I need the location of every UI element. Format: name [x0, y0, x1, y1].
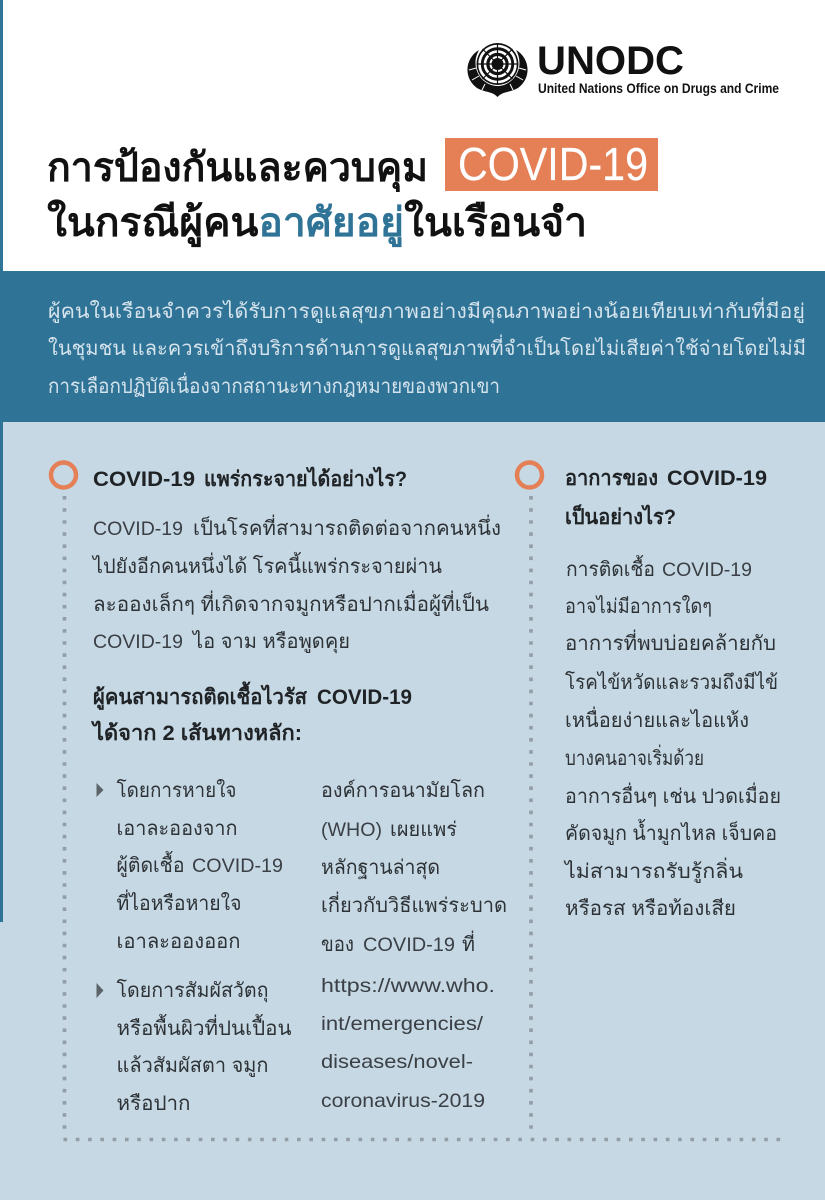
left paragraph: COVID-19 [93, 631, 183, 653]
right paragraph: คัดจมูก น้ำมูกไหล เจ็บคอ [565, 819, 777, 846]
bullet 1: เอาละอองออก [116, 931, 240, 953]
right paragraph: เหนื่อยง่ายและไอแห้ง [565, 706, 749, 732]
left paragraph: เป็นโรคที่สามารถติดต่อจากคนหนึ่ง [193, 514, 501, 540]
right paragraph: อาการอื่นๆ เช่น ปวดเมื่อย [565, 782, 781, 808]
right heading: COVID-19 [667, 467, 767, 490]
bold subheading: ได้จาก 2 เส้นทางหลัก: [91, 720, 302, 745]
intro line 1: ผู้คนในเรือนจำควรได้รับการดูแลสุขภาพอย่างมีคุณภาพอย่างน้อยเทียบเท่ากับที่มีอยู่ [48, 297, 805, 324]
WHO note: องค์การอนามัยโลก [321, 779, 485, 802]
WHO note: ที่ [462, 930, 475, 956]
right paragraph: หรือรส หรือท้องเสีย [565, 898, 736, 920]
ring marker right [517, 462, 542, 488]
bullet 2: แล้วสัมผัสตา จมูก [116, 1055, 268, 1078]
right paragraph: บางคนอาจเริ่มด้วย [565, 744, 704, 770]
left paragraph: COVID-19 [93, 518, 183, 540]
intro line 2: ในชุมชน และควรเข้าถึงบริการด้านการดูแลสุขภาพที่จำเป็นโดยไม่เสียค่าใช้จ่ายโดยไม่มี [48, 334, 806, 361]
left paragraph: ละอองเล็กๆ ที่เกิดจากจมูกหรือปากเมื่อผู้ที่เป็น [93, 590, 489, 617]
icon: UN emblem [467, 43, 528, 97]
right heading: เป็นอย่างไร? [565, 503, 676, 529]
WHO note: หลักฐานล่าสุด [321, 857, 440, 880]
left heading: COVID-19 [93, 468, 195, 491]
right paragraph: ไม่สามารถรับรู้กลิ่น [563, 857, 743, 884]
logo subtitle: United Nations Office on Drugs and Crime [538, 80, 779, 96]
WHO note: เกี่ยวกับวิธีแพร่ระบาด [321, 891, 507, 917]
WHO note: ของ [321, 934, 354, 956]
logo: UNODC [467, 39, 779, 97]
title [47, 138, 658, 247]
bullet 2: หรือพื้นผิวที่ปนเปื้อน [116, 1014, 292, 1040]
right paragraph: การติดเชื้อ [566, 555, 655, 581]
bullet 1: เอาละอองจาก [116, 818, 238, 840]
bold subheading [91, 681, 412, 745]
WHO note: (WHO) [321, 819, 382, 841]
left paragraph [91, 514, 501, 654]
WHO note: diseases/novel- [321, 1051, 473, 1073]
bullet 2: โดยการสัมผัสวัตถุ [116, 979, 268, 1003]
bold subheading: COVID-19 [317, 686, 412, 709]
bold subheading: ผู้คนสามารถติดเชื้อไวรัส [93, 681, 307, 711]
bullet 1: โดยการหายใจ [116, 779, 236, 802]
left paragraph: ไอ จาม หรือพูดคุย [191, 630, 350, 654]
intro line 3: การเลือกปฏิบัติเนื่องจากสถานะทางกฎหมายของพวกเขา [48, 372, 500, 398]
left paragraph: ไปยังอีกคนหนึ่งได้ โรคนี้แพร่กระจายผ่าน [91, 552, 442, 578]
content panel [0, 422, 825, 1200]
WHO note [321, 779, 507, 1112]
bullet 1: ที่ไอหรือหายใจ [116, 889, 242, 915]
right paragraph: โรคไข้หวัดและรวมถึงมีไข้ [565, 671, 778, 694]
right paragraph: อาการที่พบบ่อยคล้ายกับ [565, 629, 776, 655]
right paragraph: COVID-19 [662, 559, 752, 581]
WHO note: https://www.who. [321, 975, 495, 997]
WHO note: COVID-19 [363, 934, 455, 956]
WHO note: int/emergencies/ [321, 1013, 484, 1035]
bullet 2 [96, 979, 292, 1115]
intro banner [0, 271, 825, 422]
title line 1: การป้องกันและควบคุม [47, 146, 428, 193]
dotted frame [63, 496, 66, 1130]
ring marker left [51, 462, 76, 488]
logo wordmark: UNODC [537, 39, 684, 83]
badge: COVID-19: COVID-19 [458, 138, 648, 190]
right paragraph [563, 555, 781, 920]
left heading [93, 466, 407, 491]
bullet 1: COVID-19 [192, 855, 283, 877]
title line 2: ในกรณีผู้คนอาศัยอยู่ในเรือนจำ [47, 199, 587, 247]
right paragraph: อาจไม่มีอาการใดๆ [565, 595, 712, 618]
bullet 1: ผู้ติดเชื้อ [116, 851, 184, 878]
WHO note: coronavirus-2019 [321, 1090, 485, 1112]
left heading: แพร่กระจายได้อย่างไร? [204, 466, 407, 491]
bullet 2: หรือปาก [116, 1093, 190, 1115]
right heading: อาการของ [565, 467, 658, 490]
bullet 1 [96, 779, 283, 953]
WHO note: เผยแพร่ [390, 819, 457, 841]
right heading [565, 467, 767, 529]
left edge bar [0, 0, 3, 922]
